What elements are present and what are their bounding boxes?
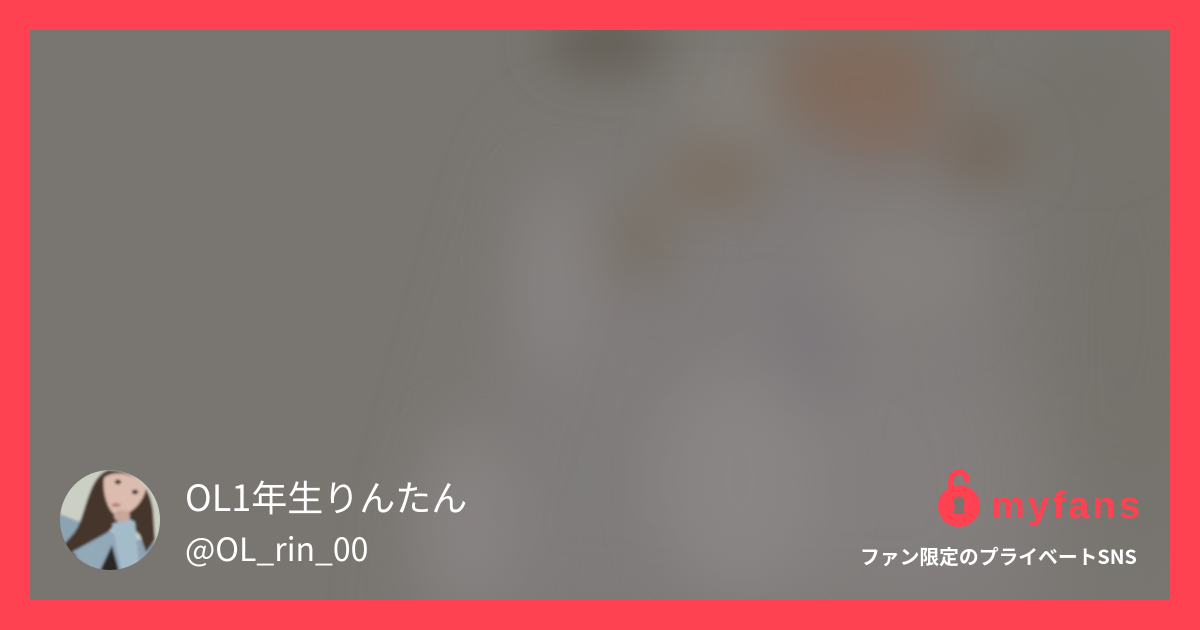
myfans logo [938,469,1143,527]
tagline: ファン限定のプライベートSNS [860,541,1137,570]
creator handle: @OL_rin_00 [185,525,368,571]
wordmark: myfans [991,485,1143,527]
avatar photo [60,470,160,570]
creator name: OL1年生りんたん [185,470,467,522]
icon: open padlock [938,469,980,527]
